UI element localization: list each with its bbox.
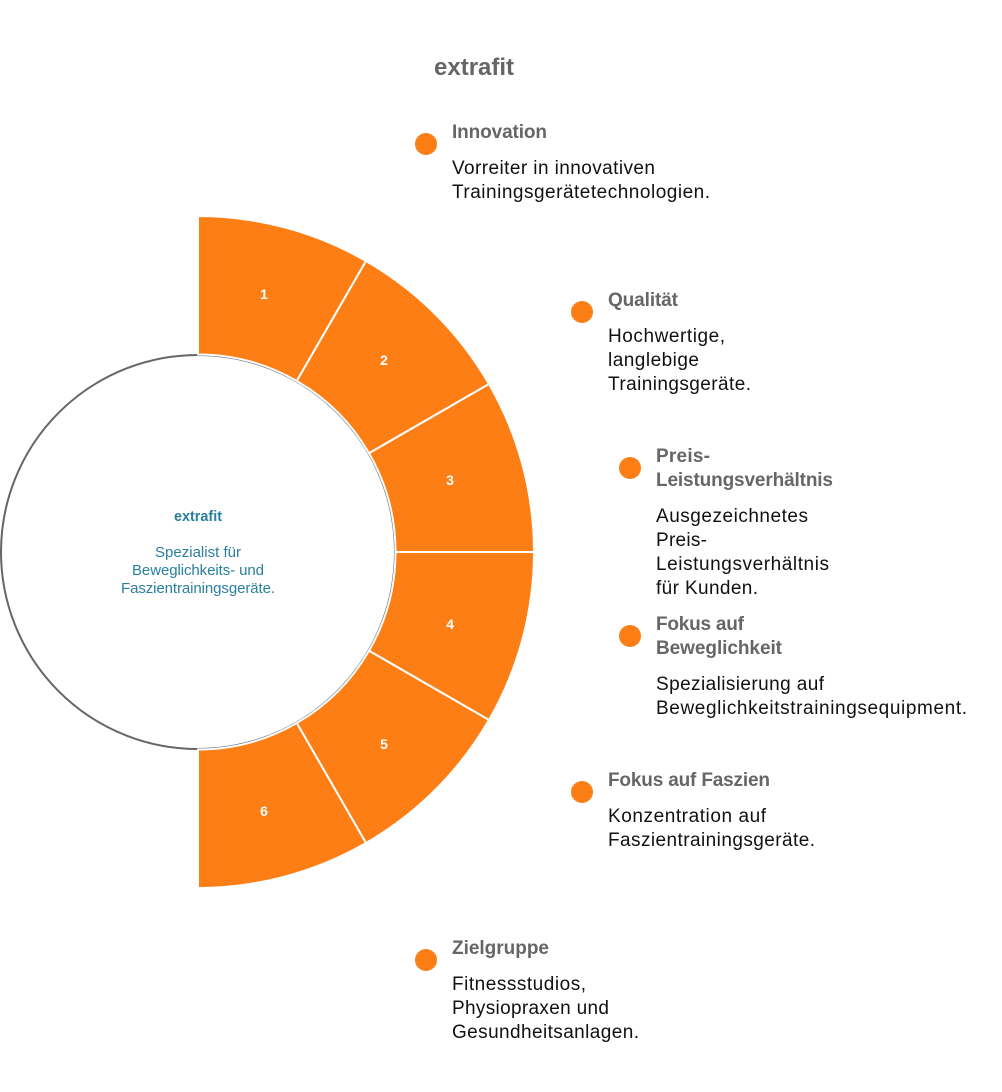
description: Konzentration auf (608, 806, 767, 827)
description: Hochwertige, (608, 326, 725, 347)
heading: Beweglichkeit (656, 638, 783, 659)
item 4: Fokus auf Beweglichkeit (619, 614, 967, 719)
center circle with company summary (1, 355, 395, 749)
center description (121, 544, 275, 597)
description: Ausgezeichnetes (656, 506, 808, 527)
item 3: Preis-Leistungsverhältnis (619, 446, 833, 599)
segment 3 (369, 384, 534, 552)
description: Spezialisierung auf (656, 674, 825, 695)
center heading: extrafit (174, 509, 222, 525)
center description: Spezialist für (155, 544, 241, 561)
description: Vorreiter in innovativen (452, 158, 655, 179)
heading: Innovation (452, 122, 547, 143)
center description: Faszientrainingsgeräte. (121, 580, 275, 597)
description (608, 806, 815, 851)
item 1: Innovation (415, 122, 710, 203)
heading: Leistungsverhältnis (656, 470, 833, 491)
bullet (571, 301, 593, 323)
heading: Fokus auf Faszien (608, 770, 770, 791)
item 5: Fokus auf Faszien (571, 770, 815, 851)
segment 6: 6 (260, 803, 268, 819)
segment 5: 5 (380, 736, 388, 752)
heading: Zielgruppe (452, 938, 549, 959)
description (452, 974, 639, 1043)
segment 6 (198, 723, 366, 888)
heading (656, 614, 783, 659)
description: Preis- (656, 530, 707, 551)
description (656, 506, 829, 599)
heading: Fokus auf (656, 614, 745, 635)
description: Leistungsverhältnis (656, 554, 829, 575)
center description: Beweglichkeits- und (132, 562, 264, 579)
segment 4 (369, 552, 534, 720)
bullet (415, 133, 437, 155)
bullet (571, 781, 593, 803)
segment 5 (297, 651, 489, 843)
heading (656, 446, 833, 491)
description (656, 674, 967, 719)
description: für Kunden. (656, 578, 758, 599)
half ring of six numbered segments (198, 216, 534, 888)
description: langlebige (608, 350, 699, 371)
title: extrafit (434, 54, 514, 81)
segment 2 (297, 261, 489, 453)
heading: Preis- (656, 446, 710, 467)
description: Physiopraxen und (452, 998, 609, 1019)
bullet (619, 457, 641, 479)
description (452, 158, 710, 203)
segment 2: 2 (380, 352, 388, 368)
segment 4: 4 (446, 616, 454, 632)
segment 1 (198, 216, 366, 381)
description: Fitnessstudios, (452, 974, 586, 995)
segment 1: 1 (260, 286, 268, 302)
description (608, 326, 751, 395)
description: Gesundheitsanlagen. (452, 1022, 639, 1043)
item 6: Zielgruppe (415, 938, 639, 1043)
description: Faszientrainingsgeräte. (608, 830, 815, 851)
heading: Qualität (608, 290, 679, 311)
item 2: Qualität (571, 290, 751, 395)
description: Trainingsgeräte. (608, 374, 751, 395)
description: Beweglichkeitstrainingsequipment. (656, 698, 967, 719)
segment 3: 3 (446, 472, 454, 488)
bullet (619, 625, 641, 647)
bullet (415, 949, 437, 971)
description: Trainingsgerätetechnologien. (452, 182, 710, 203)
